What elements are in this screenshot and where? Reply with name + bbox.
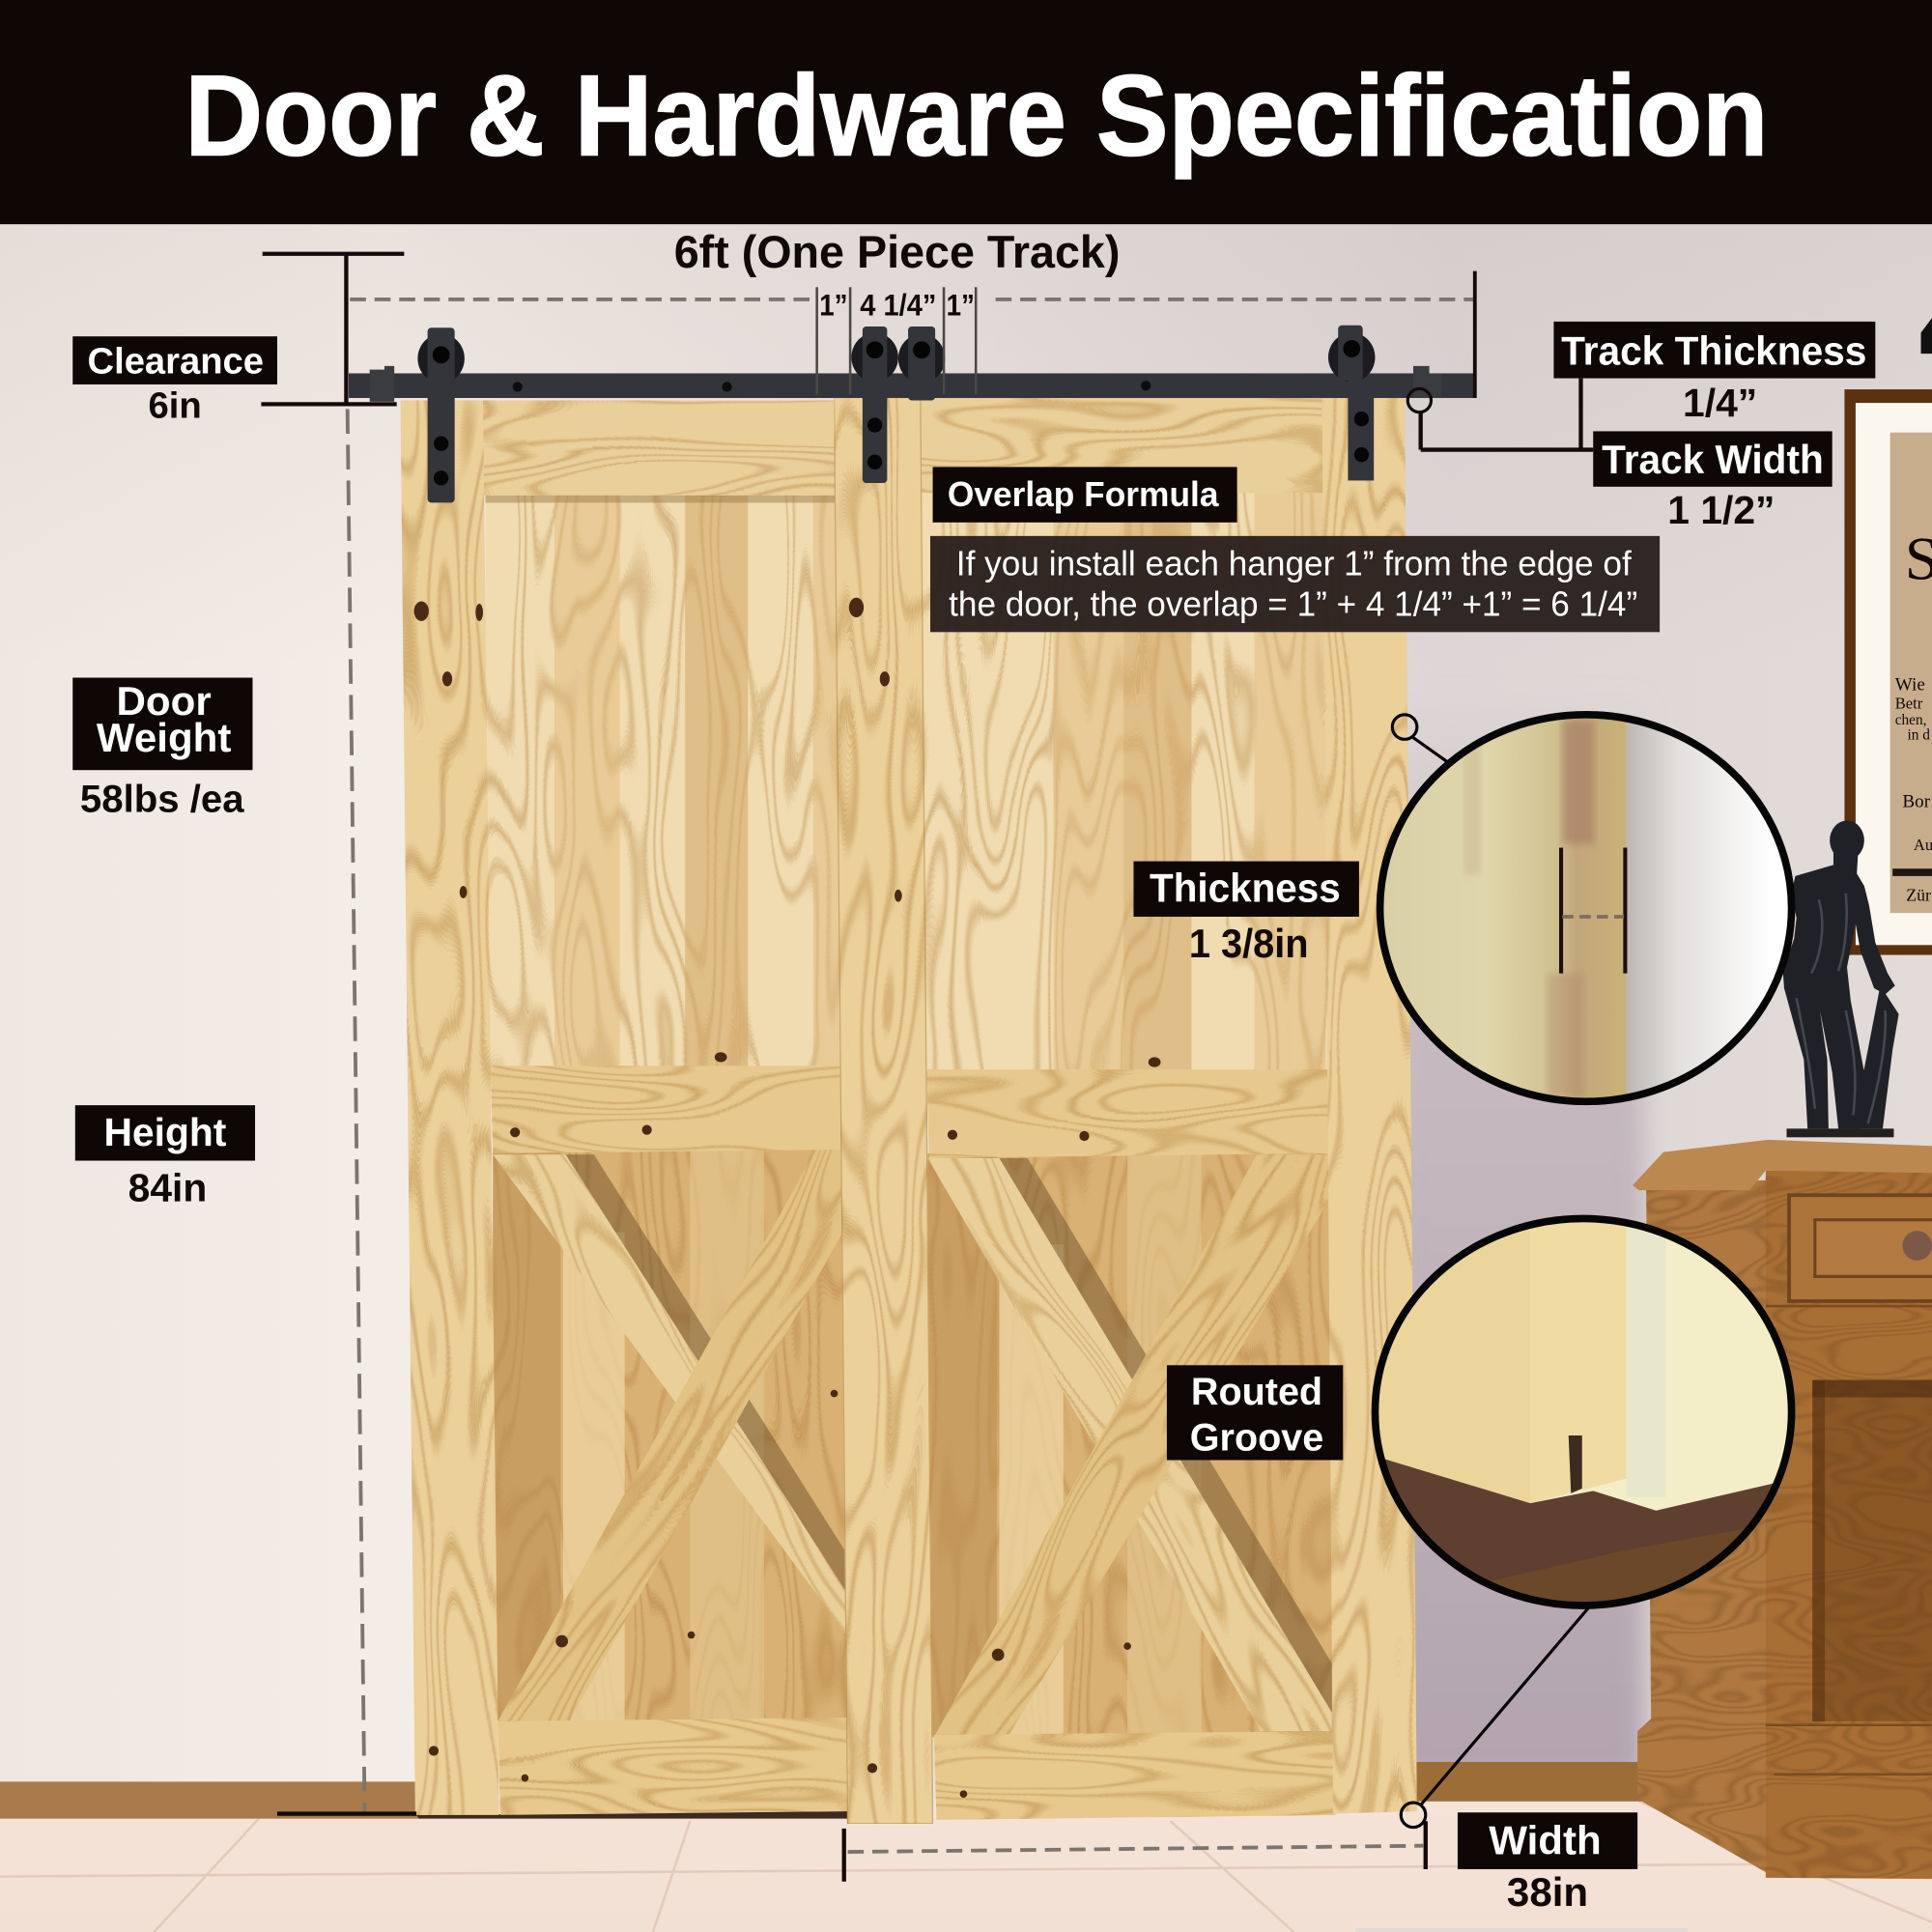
routed notch [1569,1435,1582,1493]
overlap formula text: If you install each hanger 1” from the edge of [956,545,1632,583]
right track stop [1413,366,1441,398]
track width label: Track Width [1602,437,1824,482]
drawer [1789,1195,1932,1301]
picture lettering: Bor [1902,791,1931,811]
height label: 84in [128,1166,207,1210]
floor with tiles [0,1799,1932,1932]
right door top rail [918,398,1327,493]
right door right stile [1322,397,1417,1814]
door assembly [400,398,1417,1824]
statue base [1786,1128,1893,1137]
track length label: 6ft (One Piece Track) [674,227,1120,278]
one inch right: 1” [947,288,975,323]
clearance label: 6in [148,384,202,426]
overlap formula text: the door, the overlap = 1” + 4 1/4” +1” = 6 1/4” [949,585,1637,624]
right door bottom rail [934,1731,1336,1820]
framed picture [1844,389,1932,955]
cabinet [1633,1140,1932,1879]
hanger three [898,327,945,401]
recessed panel [1812,1380,1932,1721]
thickness label: 1 3/8in [1189,921,1309,966]
statue figure [1783,820,1899,1128]
door weight label [72,678,252,821]
door weight label: 58lbs /ea [80,779,245,821]
one inch left: 1” [819,288,848,323]
magnified floor [1385,1459,1774,1581]
width label: 38in [1507,1869,1588,1915]
track rail [349,373,1475,398]
title: Door & Hardware Specification [185,53,1768,181]
left door brace one [493,1154,845,1633]
hanger four [1328,326,1375,480]
routed groove label [1167,1365,1343,1460]
picture lettering: in d [1907,726,1930,743]
magnifier: routed groove [1368,1213,1811,1620]
right door brace two [935,1154,1328,1735]
routed groove label: Groove [1190,1416,1323,1459]
leader circle [1392,715,1450,764]
picture lettering [1895,524,1932,904]
picture lettering: Wie [1895,674,1925,695]
left door top rail [483,401,842,496]
track thickness label: Track Thickness [1561,328,1866,374]
height label [75,1105,255,1210]
routed groove label: Routed [1191,1371,1322,1413]
overlap formula heading: Overlap Formula [948,475,1220,514]
width label: Width [1489,1818,1602,1863]
clearance label: Clearance [88,340,264,382]
icon: corner of object, top right [1921,318,1932,354]
left door bottom rail [497,1718,850,1815]
left door lower panel [493,1146,848,1725]
wood knots [414,598,1161,1798]
hanger spacing dimension [817,287,976,394]
thickness label [1133,862,1359,966]
statue [1783,820,1899,1137]
right door brace one [927,1158,1332,1731]
barn door track hardware [349,326,1475,502]
picture lettering: Zür [1906,885,1931,904]
left door upper panel [486,493,845,1072]
right door middle rail [926,1069,1328,1158]
magnified door [1378,1229,1530,1503]
hanger two [851,327,898,483]
door weight label: Weight [97,715,231,760]
left door left stile [401,401,499,1815]
magnifier: door thickness [1374,708,1799,1109]
left door brace two [498,1150,841,1721]
overlap formula heading [933,467,1237,523]
hanger one [417,327,465,502]
clearance label [72,336,277,426]
picture lettering: chen, [1895,712,1926,728]
left door [400,400,847,1815]
track width label [1593,431,1833,532]
thickness label: Thickness [1150,866,1341,911]
track callout leader [1407,379,1593,450]
right door upper panel [922,491,1328,1072]
title banner [0,0,1932,224]
right door [835,398,1417,1824]
right door left stile [835,397,933,1824]
thickness measurement [1561,848,1625,974]
width dimension [844,1606,1589,1882]
height label: Height [103,1110,227,1154]
clearance dimension lines [261,254,404,404]
right door lower panel [927,1153,1334,1737]
track bolts [513,381,1151,392]
rug edge [1355,1928,1688,1932]
height dimension lines [277,409,416,1814]
left door middle rail [491,1065,845,1153]
track thickness label [1553,322,1875,425]
width label [1458,1812,1637,1915]
floor shadow under doors [416,1811,850,1819]
four and a quarter inch: 4 1/4” [860,288,936,323]
picture lettering: Betr [1895,694,1923,712]
door weight label: Door [117,678,212,724]
track width label: 1 1/2” [1667,488,1775,532]
left track stop [370,366,394,402]
track thickness label: 1/4” [1683,381,1757,425]
overlap formula text [930,536,1660,632]
baseboard [0,1762,1649,1819]
